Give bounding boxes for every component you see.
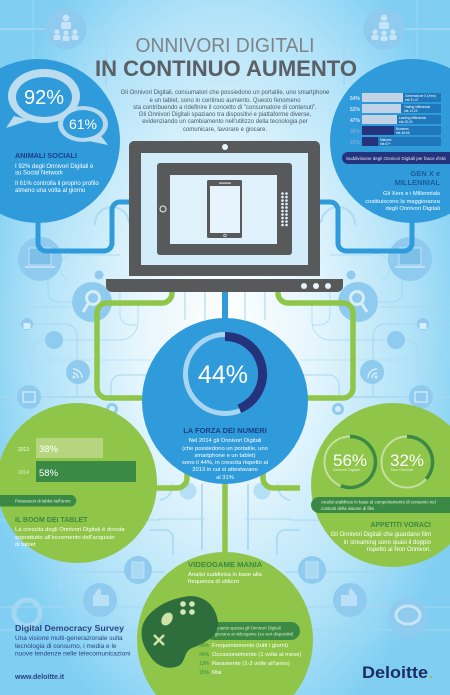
- heading: il boom dei tablet: IL BOOM DEI TABLET: [15, 517, 88, 524]
- body text: il boom dei tablet: La crescita degli Onnivori Digitali è dovuta: [15, 527, 125, 533]
- body text: gen x e millennial: Gli Xers e i Millennials: [383, 191, 440, 197]
- donut chart 32%: 32%: [390, 451, 424, 470]
- bar chart: fasce d'età: 25%: [350, 140, 361, 146]
- panel: appetiti voraci: [311, 403, 450, 567]
- donut chart 32%: [382, 436, 433, 488]
- footer: digital democracy survey: [14, 624, 130, 681]
- body text: il boom dei tablet: di tablet: [15, 542, 36, 548]
- icon: mail right: [409, 385, 433, 409]
- icon: mail left: [17, 385, 41, 409]
- icon: small dots: [45, 270, 405, 349]
- bar chart: fasce d'età: 54%: [350, 96, 361, 102]
- body text: appetiti voraci: [331, 532, 432, 553]
- pill caption: Suddivisione degli Onnivori Digitali per fasce d'età: [346, 156, 446, 161]
- title: IN CONTINUO AUMENTO: [95, 56, 357, 81]
- footer: digital democracy survey: nuove tendenze nelle telecomunicazioni: [15, 650, 130, 658]
- body text: animali sociali: almeno una volta al giorno: [15, 188, 86, 194]
- tablet: [157, 163, 292, 255]
- heading: gen x e millennial: [395, 169, 440, 187]
- intro text: sta contribuendo a ridefinire il concetto di "consumatore di contenuti".: [133, 105, 317, 111]
- bar chart: fasce d'età: Leading Millennials: [399, 116, 427, 120]
- donut chart 56%: Onnivori Digitali: [333, 468, 360, 472]
- heading: animali sociali: ANIMALI SOCIALI: [15, 151, 77, 160]
- green connectors: [97, 290, 353, 555]
- frequency list: [199, 643, 301, 676]
- icon: network top left: [46, 8, 86, 50]
- body text: videogame mania: [188, 572, 263, 585]
- intro text: Gli Onnivori Digitali, consumatori che possiedono un portatile, uno smartphone: [121, 90, 330, 96]
- icon: laptop right: [388, 237, 432, 281]
- body text: gen x e millennial: degli Onnivori Digitali: [386, 206, 440, 212]
- frequency list: 38%: [199, 643, 210, 649]
- bar chart: fasce d'età: Generazione X (Xers): [405, 94, 436, 98]
- heading: appetiti voraci: APPETITI VORACI: [370, 522, 431, 529]
- frequency list: Raramente (1-3 volte all'anno): [212, 661, 290, 667]
- pill caption: Possessori di tablet nell'anno: [15, 498, 71, 504]
- heading: videogame mania: VIDEOGAME MANIA: [188, 560, 263, 569]
- panel: gen x e millennial: [330, 59, 450, 223]
- icon: laptop left: [18, 237, 62, 281]
- heading: gen x e millennial: MILLENNIAL: [395, 178, 440, 187]
- bar chart: tablet: 2014: [18, 470, 29, 476]
- footer: digital democracy survey: tecnologia di consumo, i media e le: [15, 643, 117, 650]
- donut chart 32%: Non Onnivori: [391, 468, 413, 472]
- pill caption: Quanto spesso gli Onnivori Digitali: [215, 626, 281, 630]
- icon: gear small right: [332, 403, 344, 415]
- body text: la forza dei numeri: [182, 438, 268, 481]
- icon: tablet left: [124, 556, 152, 584]
- icon: ring bottom left: [14, 600, 40, 626]
- icon: speech bubble bottom right: [388, 598, 428, 638]
- bar chart: fasce d'età: [350, 93, 441, 146]
- logo: deloitte: Deloitte: [362, 664, 428, 682]
- body text: la forza dei numeri: smartphone e un tablet): [194, 453, 256, 459]
- panel: animali sociali: [0, 59, 120, 223]
- bar chart: fasce d'età: età 67+: [380, 142, 391, 146]
- intro text: e un tablet, sono in continuo aumento. Questo fenomeno: [149, 98, 301, 104]
- body text: videogame mania: frequenza di utilizzo: [188, 579, 239, 585]
- bar chart: tablet: 38%: [39, 444, 59, 455]
- icon: thumb left: [83, 583, 117, 617]
- bar chart: tablet: 58%: [39, 468, 59, 479]
- icon: wifi left: [66, 360, 90, 384]
- body text: appetiti voraci: rispetto ai Non Onnivori.: [367, 547, 431, 553]
- bar chart: fasce d'età: età 48-66: [396, 131, 410, 135]
- pill caption: contesti della visione di film: [321, 506, 375, 511]
- bar chart: fasce d'età: età 14-24: [404, 109, 418, 113]
- body text: animali sociali: su Social Network: [15, 170, 64, 176]
- bar chart: fasce d'età: 52%: [350, 107, 361, 113]
- title: ONNIVORI DIGITALI: [136, 35, 314, 57]
- footer: digital democracy survey: Una visione multi-generazionale sulla: [15, 635, 123, 642]
- title: [95, 35, 357, 81]
- bar chart: fasce d'età: età 31-47: [405, 98, 419, 102]
- frequency list: Frequentemente (tutti i giorni): [212, 643, 288, 649]
- donut chart 44%: [186, 334, 264, 414]
- icon: tablet right: [298, 556, 326, 584]
- pill caption: [205, 622, 300, 640]
- frequency list: Mai: [212, 670, 221, 676]
- pill caption: [342, 152, 450, 164]
- heading: gen x e millennial: GEN X e: [410, 169, 440, 178]
- icon: game controller: [142, 596, 218, 668]
- icon: thumb right: [333, 583, 367, 617]
- frequency list: 13%: [199, 661, 210, 667]
- donut chart 56%: [324, 436, 376, 488]
- speech bubble 61%: 61%: [69, 116, 97, 132]
- body text: il boom dei tablet: [15, 527, 125, 548]
- speech bubble 92%: 92%: [24, 87, 64, 109]
- body text: animali sociali: I 92% degli Onnivori Digitali è: [15, 164, 94, 170]
- heading: la forza dei numeri: LA FORZA DEI NUMERI: [183, 426, 267, 435]
- speech bubble 92%: [6, 69, 80, 128]
- bar chart: fasce d'età: Trailing Millennials: [404, 105, 431, 109]
- panel: il boom dei tablet: [0, 403, 157, 563]
- bar chart: fasce d'età: 47%: [350, 118, 361, 124]
- bar chart: tablet: 2013: [18, 447, 29, 453]
- body text: appetiti voraci: in streaming sono quasi il doppio: [344, 540, 432, 546]
- panel: videogame mania: [137, 552, 313, 695]
- pill caption: [311, 497, 450, 513]
- pill caption: Analisi stabilisce in base al comportamento di consumo nel: [321, 500, 436, 504]
- intro text: Gli Onnivori Digitali spaziano tra dispositivi e piattaforme diverse,: [139, 112, 312, 118]
- body text: il boom dei tablet: soprattutto all'incremento dell'acquisto: [15, 535, 115, 541]
- body text: gen x e millennial: costituiscono la maggioranza: [365, 199, 441, 205]
- icon: magnifier right: [338, 282, 378, 322]
- footer: digital democracy survey: www.deloitte.it: [14, 674, 65, 681]
- icon: magnifier left: [72, 282, 112, 322]
- frequency list: 15%: [199, 670, 210, 676]
- bar chart: fasce d'età: età 25-30: [399, 120, 413, 124]
- icon: network top right: [364, 8, 404, 50]
- bar chart: fasce d'età: Boomers: [396, 127, 409, 131]
- body text: la forza dei numeri: 2013 in cui si attestavano: [192, 467, 258, 473]
- icon: lock left: [21, 318, 33, 330]
- body text: la forza dei numeri: sono il 44%, in crescita rispetto al: [182, 460, 268, 466]
- body text: la forza dei numeri: (che possiedono un portatile, uno: [182, 446, 268, 452]
- pill caption: giocano ai videogame (su vari dispositivi): [215, 632, 294, 636]
- device illustration: laptop with tablet and phone: [106, 141, 343, 292]
- body text: animali sociali: [15, 164, 99, 194]
- icon: wifi right: [360, 360, 384, 384]
- donut chart 56%: 56%: [333, 451, 367, 470]
- speech bubble 61%: [58, 106, 108, 145]
- frequency list: 34%: [199, 652, 210, 658]
- frequency list: Occasionalmente (1 volta al mese): [212, 652, 301, 658]
- body text: videogame mania: Analisi suddivisa in base alla: [188, 572, 263, 578]
- thick blue connectors: [38, 202, 412, 320]
- bar chart: fasce d'età: Matures: [380, 138, 392, 142]
- intro text: comunicare, lavorare e giocare.: [183, 127, 267, 133]
- icon: small circles near center: [180, 482, 270, 500]
- body text: la forza dei numeri: Nel 2014 gli Onnivori Digitali: [189, 438, 261, 444]
- intro text: evidenziando un cambiamento nell'utilizzo della tecnologia per: [142, 119, 308, 125]
- body text: animali sociali: Il 61% controlla il proprio profilo: [15, 181, 99, 187]
- bar chart: fasce d'età: 36%: [350, 129, 361, 135]
- laptop screen: [129, 141, 320, 276]
- donut chart 44%: 44%: [198, 361, 248, 389]
- body text: appetiti voraci: Gli Onnivori Digitali che guardano film: [331, 532, 431, 538]
- bar chart: tablet: [18, 438, 136, 482]
- body text: la forza dei numeri: al 31%: [216, 475, 234, 481]
- smartphone: [207, 180, 242, 238]
- body text: gen x e millennial: [365, 191, 441, 212]
- laptop base: [106, 279, 343, 292]
- panel: la forza dei numeri: [142, 318, 308, 484]
- pill caption: [0, 495, 76, 506]
- icon: lock right: [417, 318, 429, 330]
- intro text: [121, 90, 330, 133]
- icon: gear small left: [106, 403, 118, 415]
- footer: digital democracy survey: Digital Democracy Survey: [15, 624, 125, 633]
